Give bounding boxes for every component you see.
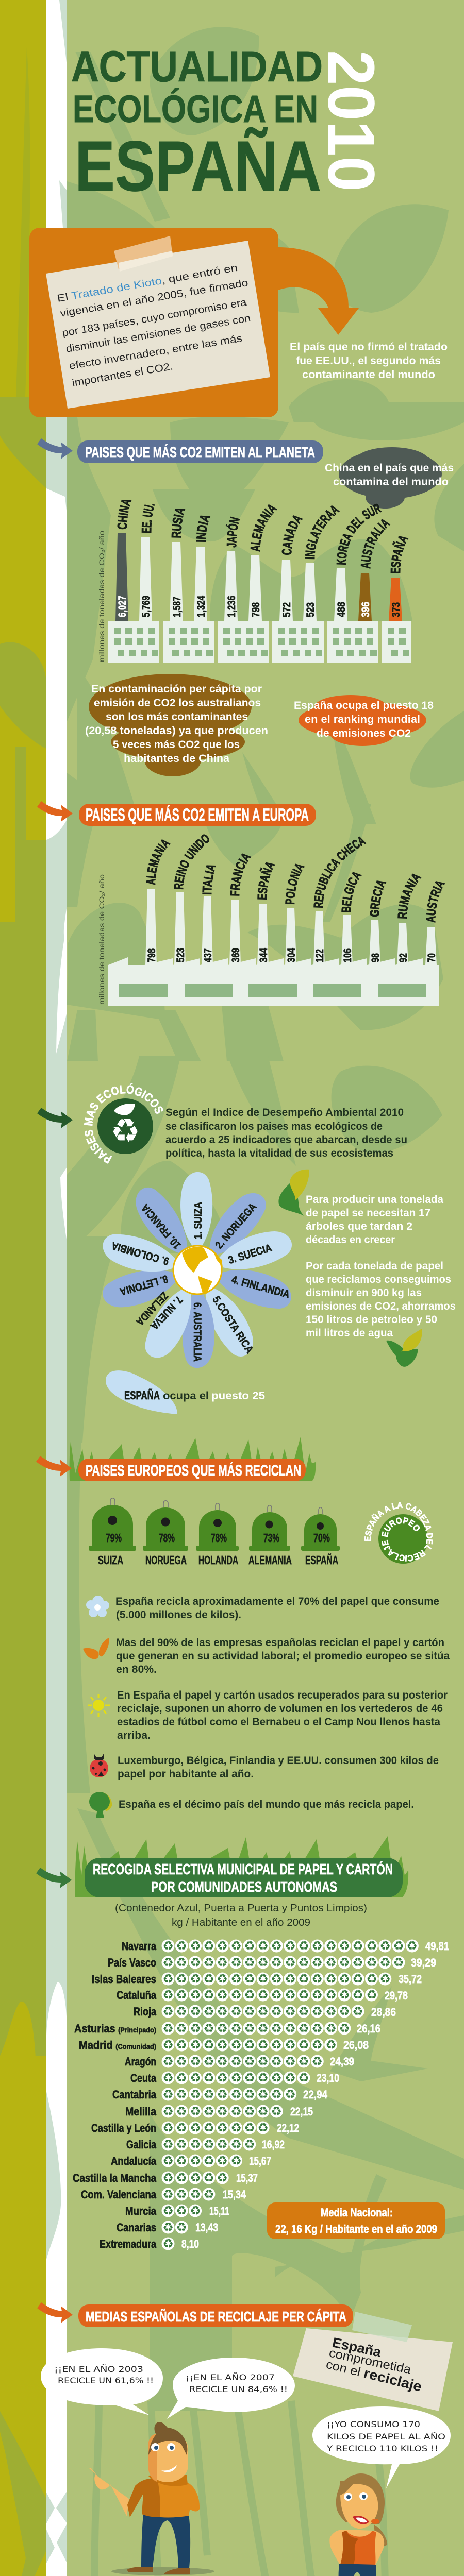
chart: world CO2 factories: CANADA — [281, 515, 303, 555]
bin: Holanda — [196, 1503, 239, 1567]
region names: Andalucía — [111, 2155, 157, 2167]
text: paper facts: que reciclamos conseguimos — [306, 1274, 451, 1285]
callout: Spain rank 25: ocupa el — [163, 1390, 209, 1402]
text: paper facts: Para producir una tonelada — [306, 1194, 443, 1206]
bin: España — [301, 1507, 340, 1567]
region values: 15,34 — [223, 2188, 246, 2201]
chimney values: 1,587 — [171, 597, 183, 617]
chart: Europe CO2 factory: REPUBLICA CHECA — [313, 837, 366, 908]
note text: España — [331, 2335, 383, 2360]
axis label: millones de toneladas de CO₂/ año — [97, 531, 106, 662]
text: fact 2: en 80%. — [116, 1664, 157, 1675]
recycle glyphs: ♻♻♻♻♻♻♻♻♻♻♻♻♻♻♻♻♻♻♻ — [162, 1939, 418, 1953]
petal labels: 10. FRANCIA — [139, 1201, 184, 1251]
region names: Canarias — [117, 2221, 156, 2234]
petal labels: ZELANDA — [134, 1290, 170, 1328]
region names: Aragón — [125, 2055, 156, 2068]
region values: 22,94 — [303, 2088, 328, 2101]
arrow: section 6 — [37, 2302, 73, 2323]
text: EE.UU. note: contaminante del mundo — [302, 369, 435, 381]
recycle glyphs — [162, 1939, 418, 2251]
recycle glyphs: ♻♻♻♻♻♻♻♻♻♻♻♻♻♻ — [162, 2021, 350, 2036]
cloud: China: contamina del mundo — [333, 476, 449, 488]
bin: España: 70% — [313, 1531, 330, 1545]
text: fact 1: España recicla aproximadamente el 70% del papel que consume — [115, 1596, 439, 1607]
text: fact 4: papel por habitante al año. — [118, 1768, 254, 1780]
chimney values: 106 — [342, 948, 354, 962]
text: paper facts: disminuir en 900 kg las — [306, 1287, 422, 1299]
region names: Rioja — [134, 2005, 157, 2018]
note text: vigencia en el año 2005, fue firmado — [59, 277, 249, 319]
callout: national average: Media Nacional: — [321, 2206, 393, 2219]
curved label: PAISES MAS ECOLÓGICOS — [84, 1083, 163, 1164]
text: EE.UU. note — [290, 341, 448, 381]
cloud: Spain rank — [294, 695, 434, 746]
region names: Navarra — [122, 1940, 157, 1953]
chimney values: 304 — [286, 948, 297, 962]
text: fact 2: que generan en su actividad laboral; el promedio europeo se sitúa — [116, 1650, 450, 1662]
recycle glyphs: ♻♻♻♻♻♻♻♻♻ — [162, 2104, 282, 2119]
text: index explanation — [165, 1107, 407, 1159]
bin: Suiza: 79% — [106, 1531, 122, 1545]
petals — [98, 1172, 296, 1368]
chart: world CO2 factories: ESPAÑA — [391, 536, 408, 573]
chimney values: 6,027 — [117, 596, 128, 617]
region names: Castilla la Mancha — [73, 2172, 157, 2184]
speech bubble: 2003: ¡¡EN EL AÑO 2003 — [54, 2364, 143, 2374]
recycle glyphs: ♻♻♻♻ — [162, 2187, 214, 2201]
region values — [181, 1940, 449, 2250]
petal labels: 1. SUIZA — [192, 1202, 204, 1239]
chimney values: 1,236 — [226, 596, 238, 617]
region names — [73, 1940, 157, 2250]
recycle glyphs: ♻♻♻♻♻♻♻♻♻♻♻♻♻ — [162, 2038, 337, 2052]
chimney values: 488 — [336, 602, 347, 617]
icon: leaf — [114, 1104, 135, 1115]
flower chart: top 10 countries — [98, 1172, 296, 1368]
bin: Noruega: NORUEGA — [145, 1553, 187, 1567]
arrow: section 3 — [37, 1108, 73, 1128]
chart: world CO2 factories: KOREA DEL SUR — [336, 504, 382, 565]
cloud: Spain rank: España ocupa el puesto 18 — [294, 700, 434, 711]
region values: 22,15 — [290, 2105, 313, 2118]
chart: recycling bins — [89, 1498, 340, 1567]
factory building — [108, 957, 439, 1006]
title: ESPAÑA — [75, 127, 321, 206]
bin: Suiza — [89, 1498, 136, 1567]
callout: Spain rank 25: ESPAÑA — [124, 1388, 160, 1402]
chimneys — [115, 533, 402, 621]
heading: per capita: MEDIAS ESPAÑOLAS DE RECICLAJE PER CÁPITA — [86, 2309, 346, 2325]
cloud: Spain rank: en el ranking mundial — [305, 714, 420, 725]
text: index explanation: política, hasta la vitalidad de sus ecosistemas — [165, 1147, 393, 1159]
recycle glyphs: ♻♻♻♻♻ — [162, 2171, 228, 2185]
text: fact 3: En España el papel y cartón usados recuperados para su posterior — [117, 1689, 448, 1701]
icon: leaves bottom — [386, 1329, 422, 1367]
chart: Europe CO2 factory: GRECIA — [370, 880, 387, 917]
text: index explanation: Según el Indice de Desempeño Ambiental 2010 — [165, 1107, 404, 1118]
text: index explanation: se clasificaron los paises mas ecológicos de — [165, 1121, 383, 1132]
note text: disminuir las emisiones de gases con — [65, 313, 252, 355]
badge: Spain at head of recycling: ESPAÑA A LA CABEZA DEL RECICLAJE EUROPEO — [364, 1502, 433, 1562]
smoke labels — [127, 500, 408, 574]
bin: Noruega: 78% — [159, 1531, 175, 1545]
chimney values: 5,769 — [140, 596, 152, 617]
chart: world CO2 factories: CHINA — [117, 500, 132, 530]
region values: 16,92 — [262, 2138, 285, 2151]
cloud: per capita: emisión de CO2 los australianos — [94, 697, 261, 709]
region names: Cantabria — [112, 2088, 157, 2101]
chimney values: 122 — [314, 949, 326, 962]
heading: recycling countries: PAISES EUROPEOS QUE MÁS RECICLAN — [86, 1462, 301, 1479]
chart: Europe CO2 factory: ESPAÑA — [257, 862, 275, 900]
note text — [56, 262, 252, 389]
chimney values: 98 — [370, 953, 382, 962]
text: fact 1 — [115, 1596, 439, 1621]
cloud: per capita — [85, 674, 268, 776]
petal labels: 3. SUECIA — [227, 1242, 273, 1266]
chimney values — [117, 596, 402, 617]
arrow: section 1 — [37, 438, 73, 459]
region values: 15,37 — [236, 2172, 258, 2184]
tape — [352, 2312, 412, 2342]
chimney values: 396 — [360, 602, 372, 617]
bin: Alemania: 73% — [263, 1531, 279, 1545]
chart: world CO2 factories: ALEMANIA — [251, 504, 277, 552]
icon: ladybug — [90, 1754, 108, 1777]
icon: recycling: ♻ — [110, 1112, 140, 1149]
region names: Murcia — [125, 2205, 157, 2217]
region values: 24,39 — [330, 2055, 354, 2068]
icon: globe — [173, 1246, 223, 1294]
text: paper facts: emisiones de CO2, ahorramos — [306, 1300, 456, 1312]
paper note — [46, 241, 270, 409]
chart: Europe CO2 factory: AUSTRIA — [426, 881, 445, 923]
text: paper facts: 150 litros de petroleo y 50 — [306, 1314, 437, 1326]
speech bubble: consumption: KILOS DE PAPEL AL AÑO — [327, 2432, 445, 2442]
recycle glyphs: ♻♻♻♻♻♻♻♻♻♻ — [162, 2087, 296, 2102]
tape — [114, 236, 173, 272]
heading: recycling countries — [78, 1459, 306, 1481]
chart: Europe CO2 factory: RUMANIA — [397, 874, 422, 919]
text: fact 2 — [116, 1637, 450, 1675]
recycle glyphs: ♻♻♻ — [162, 2204, 201, 2218]
chimneys — [145, 889, 437, 965]
chart: world CO2 factories: JAPÓN — [226, 516, 240, 548]
bin: Alemania — [248, 1505, 292, 1567]
axis label: millones de toneladas de CO₂/ año — [97, 874, 106, 1005]
chart: Europe CO2 factory — [97, 834, 445, 1006]
recycle glyphs: ♻♻♻♻♻♻♻♻♻♻♻♻♻♻♻♻ — [162, 1988, 377, 2002]
chimney values: 523 — [175, 948, 187, 962]
icon: leaves top — [278, 1170, 309, 1216]
icon: butterfly — [83, 1638, 109, 1659]
arrow: section 4 — [36, 1456, 72, 1477]
callout: national average — [267, 2202, 445, 2239]
note text: El Tratado de Kioto , que entró en — [56, 262, 239, 304]
icon: flower — [86, 1596, 109, 1617]
recycle glyphs: ♻♻♻♻♻♻♻♻♻♻♻ — [162, 2071, 309, 2085]
text: EE.UU. note: El país que no firmó el tratado — [290, 341, 448, 353]
speech bubble: consumption — [312, 2406, 451, 2488]
region names: Madrid (Comunidad) — [79, 2039, 156, 2052]
region names: Extremadura — [100, 2238, 157, 2250]
recycle glyphs: ♻♻ — [162, 2220, 187, 2234]
petal labels: 6. AUSTRALIA — [191, 1302, 203, 1362]
cloud: Spain rank: de emisiones CO2 — [317, 727, 411, 739]
chart: Europe CO2 factory: ITALIA — [202, 865, 217, 894]
arrow: to EE.UU. note — [278, 247, 359, 335]
chart: world CO2 factories — [97, 500, 411, 663]
region names: Ceuta — [130, 2072, 157, 2084]
chimney values: 373 — [390, 602, 402, 617]
region names: Cataluña — [117, 1989, 157, 2002]
bullet list: recycling facts — [83, 1596, 450, 1818]
region names: Melilla — [125, 2105, 157, 2118]
chimney values: 572 — [281, 602, 293, 617]
chart: Europe CO2 factory: BELGICA — [341, 872, 362, 912]
petal labels: 2. NORUEGA — [213, 1201, 259, 1251]
text: fact 3 — [117, 1689, 448, 1741]
smoke labels — [155, 839, 445, 923]
text: paper facts: mil litros de agua — [306, 1327, 393, 1339]
region values: 22,12 — [277, 2122, 299, 2134]
petal labels: 7. NUEVA — [148, 1294, 185, 1332]
recycle glyphs: ♻♻♻♻♻♻♻♻♻♻♻♻♻♻♻♻♻♻ — [162, 1955, 404, 1970]
cloud: per capita: habitantes de China — [124, 753, 229, 765]
petal labels: 9. COLOMBIA — [110, 1240, 171, 1267]
petal labels — [110, 1201, 291, 1362]
text: index explanation: acuerdo a 25 indicadores que abarcan, desde su — [165, 1134, 407, 1146]
title — [71, 42, 323, 206]
region names: Castilla y León — [91, 2122, 156, 2134]
region values: 15,11 — [209, 2205, 229, 2217]
text: fact 4 — [118, 1755, 439, 1780]
petal labels: 8. LETONIA — [119, 1273, 169, 1298]
region values: 26,08 — [343, 2039, 369, 2052]
text: fact 3: estadios de fútbol como el Bernabeu o el Camp Nou llenos hasta — [117, 1716, 440, 1728]
region values: 28,86 — [371, 2006, 396, 2019]
speech bubble: 2003: RECICLE UN 61,6% !! — [58, 2376, 154, 2385]
text: fact 2: Mas del 90% de las empresas españolas reciclan el papel y cartón — [116, 1637, 444, 1649]
heading: selective collection: POR COMUNIDADES AUTONOMAS — [151, 1879, 337, 1895]
callout: Spain rank 25 — [106, 1370, 265, 1414]
chart: world CO2 factories: INGLATERAA — [305, 505, 340, 560]
petal labels: 4. FINLANDIA — [230, 1274, 291, 1300]
badge: most ecological countries — [84, 1083, 163, 1164]
arrow: section 2 — [37, 801, 73, 822]
chart: world CO2 factories: RUSIA — [171, 509, 186, 538]
note text: comprometida — [328, 2346, 413, 2377]
note text — [325, 2335, 423, 2395]
heading: per capita — [78, 2304, 353, 2327]
note text: con el reciclaje — [325, 2356, 423, 2395]
text: chart subtitle: kg / Habitante en el año 2009 — [172, 1917, 310, 1928]
callout: Spain rank 25: puesto 25 — [211, 1390, 265, 1402]
bin: Suiza: SUIZA — [98, 1553, 123, 1567]
petal labels: 5.COSTA RICA — [210, 1294, 256, 1355]
factory windows — [119, 984, 426, 997]
speech bubble: 2007: ¡¡EN EL AÑO 2007 — [186, 2372, 275, 2382]
title: ECOLÓGICA EN — [73, 88, 318, 130]
chimney values — [146, 948, 438, 962]
region values: 29,78 — [385, 1989, 408, 2002]
chimney values: 523 — [305, 602, 317, 617]
chart: Europe CO2 factory: REINO UNIDO — [174, 834, 209, 889]
chart: world CO2 factories: EE. UU. — [141, 504, 155, 533]
speech bubble: consumption: ¡¡YO CONSUMO 170 — [327, 2419, 420, 2429]
icon: tree — [89, 1792, 112, 1818]
bin: Holanda: HOLANDA — [198, 1553, 238, 1567]
bin: Holanda: 78% — [211, 1531, 227, 1545]
cloud: per capita: 5 veces más CO2 que los — [113, 739, 240, 751]
bin: Noruega — [143, 1501, 188, 1567]
text: chart subtitle — [115, 1903, 367, 1928]
text: paper facts: décadas en crecer — [306, 1234, 395, 1246]
text: fact 5: España es el décimo país del mundo que más recicla papel. — [119, 1799, 414, 1810]
region values: 49,81 — [425, 1940, 449, 1953]
cloud: per capita: (20,58 toneladas) ya que producen — [85, 725, 268, 737]
note text: por 183 países, cuyo compromiso era — [61, 297, 248, 339]
text: paper facts: árboles que tardan 2 — [306, 1221, 412, 1232]
region values: 35,72 — [399, 1973, 422, 1986]
recycle glyphs: ♻♻♻♻♻♻♻ — [162, 2137, 255, 2151]
year 2010: 2010 — [314, 50, 388, 192]
note text: efecto invernadero, entre las más — [68, 333, 243, 372]
region values: 13,43 — [195, 2221, 218, 2234]
heading: world emitters — [77, 440, 323, 463]
heading: Europe emitters — [79, 804, 316, 826]
text: fact 3: arriba. — [117, 1730, 151, 1741]
cloud: China: China en el país que más — [325, 462, 454, 474]
speech bubble: 2007 — [167, 2358, 295, 2419]
text: paper facts: Por cada tonelada de papel — [306, 1260, 443, 1272]
region names: Com. Valenciana — [81, 2188, 157, 2201]
chimney values: 798 — [250, 602, 262, 617]
bin: Alemania: ALEMANIA — [248, 1553, 292, 1567]
region names: Asturias (Principado) — [74, 2022, 156, 2035]
recycle glyphs: ♻ — [162, 2236, 174, 2251]
region values: 23,10 — [317, 2072, 339, 2084]
chimney values: 437 — [202, 948, 214, 962]
recycle glyphs: ♻♻♻♻♻♻♻♻♻♻♻♻♻♻♻ — [162, 2004, 363, 2019]
heading: Europe emitters: PAISES QUE MÁS CO2 EMITEN A EUROPA — [86, 805, 309, 825]
speech bubble: 2007: RECICLE UN 84,6% !! — [189, 2384, 288, 2394]
text: fact 3: reciclaje, suponen un ahorro de volumen en los vertederos de 46 — [117, 1703, 443, 1715]
region values: 26,16 — [357, 2022, 380, 2035]
cloud: China — [325, 447, 454, 509]
paper note: Spain committed — [293, 2312, 453, 2411]
region names: Islas Baleares — [92, 1973, 156, 1986]
character: man pointing — [89, 2422, 214, 2575]
grass: recycling heading — [70, 1437, 316, 1481]
chart: Europe CO2 factory: ALEMANIA — [146, 839, 171, 885]
text: fact 1: (5.000 millones de kilos). — [116, 1609, 241, 1621]
speech bubble: 2003 — [41, 2348, 163, 2415]
grass: collection heading — [75, 1836, 408, 1897]
cloud: per capita: En contaminación per cápita por — [91, 683, 262, 695]
panel: Kioto treaty — [29, 228, 359, 417]
text: chart subtitle: (Contenedor Azul, Puerta a Puerta y Puntos Limpios) — [115, 1903, 367, 1914]
text: fact 4: Luxemburgo, Bélgica, Finlandia y EE.UU. consumen 300 kilos de — [118, 1755, 439, 1767]
recycle glyphs: ♻♻♻♻♻♻♻♻ — [162, 2121, 269, 2135]
icon: sun — [88, 1694, 110, 1717]
text: paper facts — [306, 1194, 456, 1339]
chimney values: 92 — [397, 953, 409, 962]
pictogram chart: collection by region — [73, 1939, 449, 2251]
callout: national average: 22, 16 Kg / Habitante en el año 2009 — [275, 2223, 437, 2235]
note text: importantes el CO2. — [71, 361, 174, 389]
chart: Europe CO2 factory: FRANCIA — [230, 853, 252, 896]
recycle glyphs: ♻♻♻♻♻♻♻♻♻♻♻♻♻♻♻♻♻ — [162, 1972, 391, 1986]
recycle glyphs: ♻♻♻♻♻♻ — [162, 2154, 242, 2168]
character: woman — [302, 2473, 403, 2576]
chimney values: 1,324 — [195, 596, 207, 617]
chimney values: 70 — [426, 953, 438, 962]
title: ACTUALIDAD — [71, 42, 323, 91]
chart: world CO2 factories: INDIA — [196, 515, 210, 542]
chart: world CO2 factories: AUSTRALIA — [361, 519, 391, 569]
cloud: per capita: son los más contaminantes — [106, 711, 248, 723]
chimney values: 344 — [258, 948, 270, 962]
region values: 15,67 — [249, 2155, 271, 2167]
region values: 8,10 — [181, 2238, 199, 2250]
factory blocks — [108, 621, 411, 663]
recycle glyphs: ♻♻♻♻♻♻♻♻♻♻♻♻ — [162, 2054, 323, 2069]
white and pale green ribbon — [46, 0, 67, 2576]
speech bubble: consumption: Y RECICLO 110 KILOS !! — [326, 2444, 438, 2453]
icon discs — [168, 1946, 412, 2244]
bin: España: ESPAÑA — [305, 1553, 338, 1567]
heading: world emitters: PAISES QUE MÁS CO2 EMITEN AL PLANETA — [85, 444, 315, 461]
region names: País Vasco — [108, 1956, 156, 1969]
region names: Galicia — [126, 2138, 157, 2151]
heading: selective collection — [85, 1858, 403, 1897]
arrow: section 5 — [36, 1868, 72, 1888]
text: EE.UU. note: fue EE.UU., el segundo más — [296, 355, 441, 367]
left olive strip — [0, 0, 46, 2576]
chimney values: 798 — [146, 948, 158, 962]
chimney values: 369 — [230, 948, 242, 962]
region values: 39,29 — [411, 1956, 436, 1969]
chart: Europe CO2 factory: POLONIA — [285, 863, 305, 905]
factory windows — [114, 628, 409, 656]
text: paper facts: de papel se necesitan 17 — [306, 1207, 430, 1219]
